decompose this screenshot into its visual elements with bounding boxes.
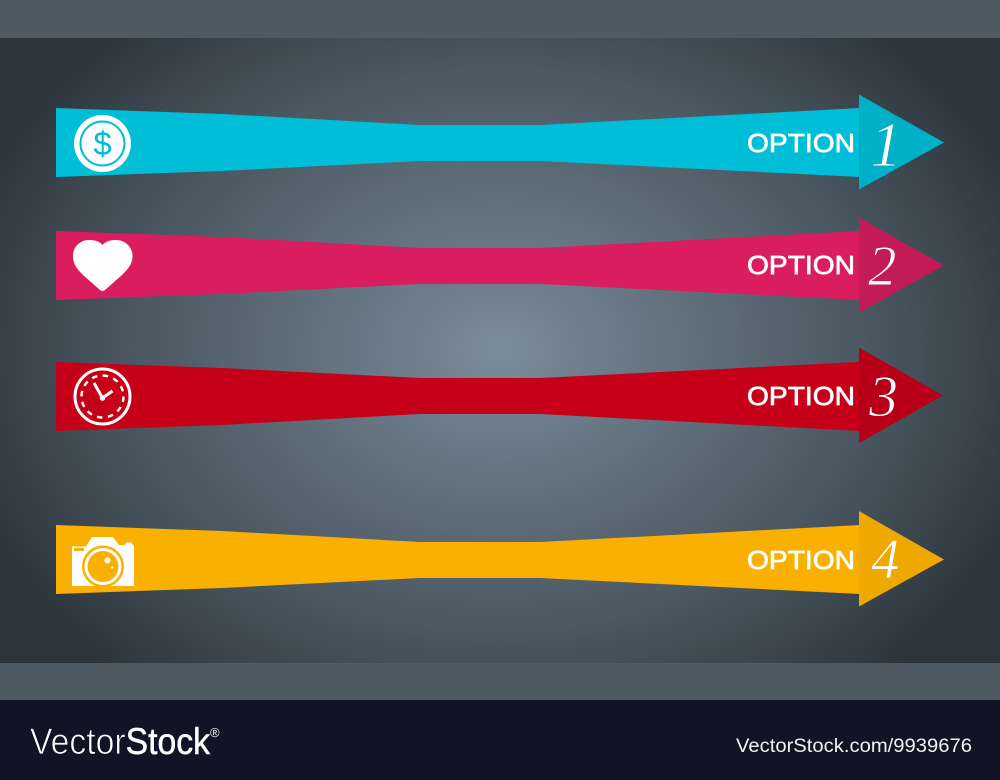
bottom band bbox=[0, 663, 1000, 700]
ribbon body bbox=[56, 108, 860, 177]
label: OPTION: OPTION bbox=[747, 545, 855, 575]
arrow head bbox=[859, 348, 943, 443]
arrow 1: option 1 bbox=[56, 94, 944, 190]
number 2: 2 bbox=[868, 235, 896, 298]
number 3: 3 bbox=[868, 364, 898, 429]
top band bbox=[0, 0, 1000, 38]
icon: clock bbox=[75, 369, 130, 424]
arrow 2: option 2 bbox=[56, 218, 944, 312]
footer url: VectorStock.com/9939676 bbox=[736, 736, 972, 757]
footer logo: VectorStock bbox=[30, 721, 210, 762]
label: OPTION: OPTION bbox=[747, 128, 855, 158]
icon: dollar coin: $ bbox=[93, 125, 112, 162]
arrow head bbox=[859, 94, 944, 190]
icon: dollar coin bbox=[74, 115, 131, 172]
icon: heart bbox=[73, 240, 132, 291]
label: OPTION: OPTION bbox=[747, 381, 855, 411]
footer bar bbox=[0, 700, 1000, 780]
ribbon body bbox=[56, 362, 860, 431]
label: OPTION: OPTION bbox=[747, 250, 855, 280]
number 4: 4 bbox=[871, 528, 900, 591]
ribbon body bbox=[56, 525, 860, 594]
arrow head bbox=[859, 218, 944, 312]
number 1: 1 bbox=[870, 109, 902, 180]
arrow 3: option 3 bbox=[56, 348, 943, 443]
icon: camera bbox=[72, 537, 134, 588]
ribbon body bbox=[56, 231, 860, 300]
registered mark: ® bbox=[210, 725, 220, 740]
arrow head bbox=[859, 511, 944, 606]
arrow 4: option 4 bbox=[56, 511, 944, 606]
